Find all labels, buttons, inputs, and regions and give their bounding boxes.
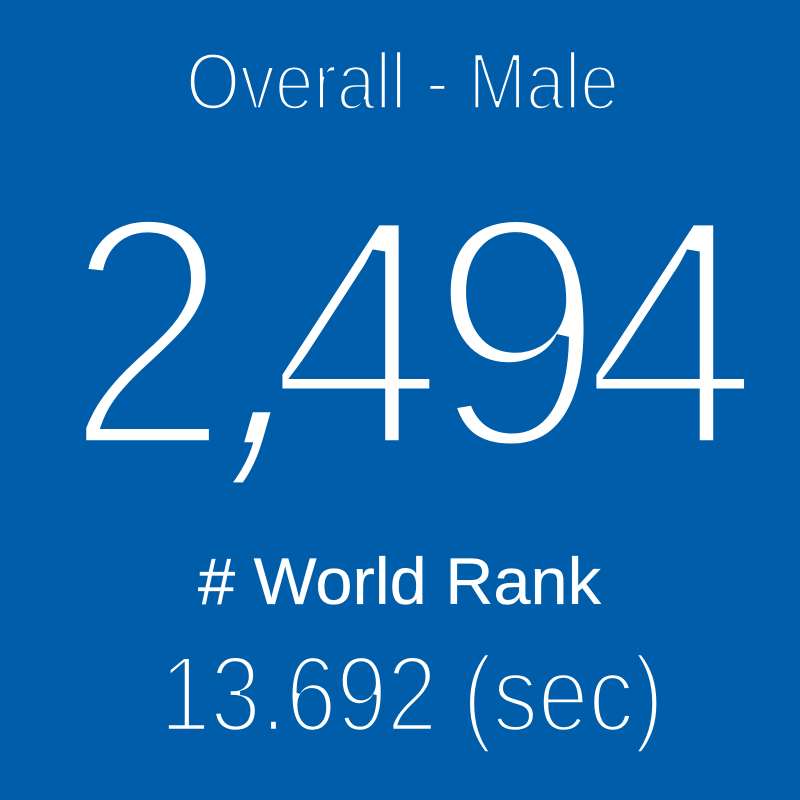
metric label: # World Rank bbox=[198, 544, 602, 618]
title: Overall - Male bbox=[186, 37, 619, 127]
big number: rank value: 2 bbox=[65, 146, 230, 518]
big number: rank value: 9 bbox=[430, 147, 605, 518]
time value: 13.692 (sec) bbox=[160, 633, 664, 754]
big number: rank value bbox=[65, 146, 760, 518]
big number: rank value: , bbox=[204, 162, 362, 511]
big number: rank value: 4 bbox=[269, 146, 445, 518]
big number: rank value: 4 bbox=[583, 146, 760, 517]
